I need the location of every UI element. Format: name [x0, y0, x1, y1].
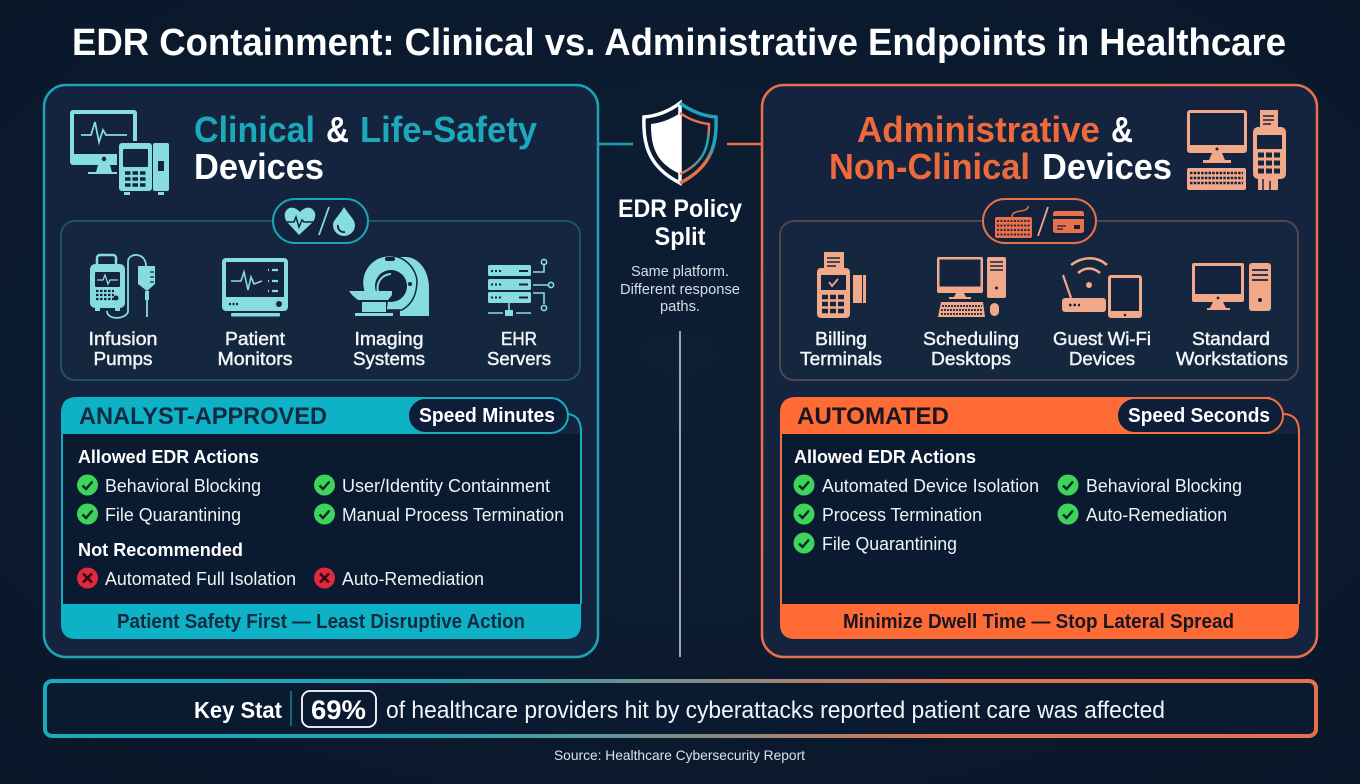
allowed actions: File Quarantining: [105, 505, 241, 525]
label: Patient: [225, 328, 285, 349]
label: Standard: [1192, 328, 1270, 349]
label: EHR: [501, 328, 537, 349]
allowed actions: Allowed EDR Actions: [794, 447, 976, 467]
speed pill: Speed Minutes: [419, 405, 555, 427]
device: billing terminals: [800, 252, 882, 369]
heading: clinical and life-safety devices: &: [326, 109, 349, 150]
key stat label: Key Stat: [194, 697, 282, 723]
key stat bar: [45, 681, 1316, 736]
icon: desktop and payment terminal: [1187, 110, 1286, 190]
label: Desktops: [931, 348, 1011, 369]
center description: Same platform.: [631, 263, 729, 280]
title: EDR Containment: Clinical vs. Administrative Endpoints in Healthcare: [72, 22, 1286, 64]
card footer: Minimize Dwell Time — Stop Lateral Spread: [843, 611, 1234, 633]
heading: clinical and life-safety devices: Devices: [194, 146, 324, 187]
allowed actions: Allowed EDR Actions: [78, 447, 259, 467]
label: Systems: [353, 348, 425, 369]
heading: administrative and non-clinical devices: Devices: [1042, 146, 1172, 187]
card label: ANALYST-APPROVED: [79, 403, 327, 430]
heading: clinical and life-safety devices: Clinical: [194, 109, 315, 150]
label: Scheduling: [923, 328, 1019, 349]
badge: heart and drop: [273, 199, 368, 243]
allowed actions: Behavioral Blocking: [105, 476, 261, 496]
device: standard workstations: [1176, 263, 1288, 369]
center heading: Split: [654, 223, 706, 251]
icon: workstation: [1192, 263, 1271, 311]
icon: CT scanner: [349, 256, 429, 316]
badge: keyboard and card: [983, 199, 1096, 243]
device group box: administrative: [780, 199, 1298, 380]
panel: administrative and non-clinical devices: [762, 85, 1317, 657]
stat value: 69%: [311, 695, 366, 725]
allowed actions: Auto-Remediation: [1086, 505, 1227, 525]
not recommended actions: Not Recommended: [78, 540, 243, 560]
allowed actions: [794, 447, 1242, 554]
heading: clinical and life-safety devices: [194, 109, 537, 187]
speed pill: [408, 398, 568, 433]
icon: infusion pump: [90, 255, 155, 318]
device group box: clinical: [61, 199, 580, 380]
label: Pumps: [94, 348, 152, 369]
source: Source: Healthcare Cybersecurity Report: [554, 747, 805, 763]
center description: paths.: [660, 298, 700, 315]
allowed actions: File Quarantining: [822, 534, 957, 554]
device: scheduling desktops: [923, 257, 1019, 369]
card footer: [780, 604, 1299, 639]
card header bar: [61, 397, 550, 434]
allowed actions: Automated Device Isolation: [822, 476, 1039, 496]
icon: router, wifi and tablet: [1062, 258, 1142, 318]
icon: billing terminal: [817, 252, 866, 318]
label: Monitors: [218, 348, 292, 369]
heading: administrative and non-clinical devices: Administrative: [857, 109, 1100, 150]
icon: patient monitor: [222, 258, 288, 316]
heading: administrative and non-clinical devices: &: [1111, 109, 1133, 150]
allowed actions: Behavioral Blocking: [1086, 476, 1242, 496]
label: Imaging: [354, 328, 424, 349]
center divider line: [679, 331, 681, 657]
icon: split shield: [644, 103, 716, 183]
panel: clinical and life-safety devices: [44, 85, 598, 657]
allowed actions: User/Identity Containment: [342, 476, 550, 496]
center heading: EDR Policy: [618, 195, 742, 223]
speed pill: Speed Seconds: [1128, 405, 1270, 427]
icon: clinical monitor and pump: [70, 110, 169, 195]
center: EDR policy split: [598, 103, 762, 657]
response card: automated: [780, 397, 1299, 639]
device: EHR servers: [487, 259, 554, 369]
stat description: of healthcare providers hit by cyberattacks reported patient care was affected: [386, 697, 1165, 724]
heading: administrative and non-clinical devices: Non-Clinical: [829, 146, 1030, 187]
label: Servers: [487, 348, 551, 369]
not recommended actions: Automated Full Isolation: [105, 569, 296, 589]
icon: desktop with keyboard: [937, 257, 1006, 317]
card footer: [61, 604, 581, 639]
device: patient monitors: [218, 258, 292, 369]
allowed actions: [77, 447, 564, 525]
device: guest wi-fi devices: [1053, 258, 1151, 369]
card footer: Patient Safety First — Least Disruptive Action: [117, 611, 525, 633]
label: Devices: [1069, 348, 1135, 369]
center description: Different response: [620, 281, 740, 298]
stat value: [302, 691, 376, 727]
device: infusion pumps: [88, 255, 158, 369]
not recommended actions: Auto-Remediation: [342, 569, 484, 589]
response card: analyst-approved: [61, 397, 581, 639]
allowed actions: Manual Process Termination: [342, 505, 564, 525]
icon: server rack: [488, 259, 554, 316]
label: Workstations: [1176, 348, 1288, 369]
device: imaging systems: [349, 256, 429, 369]
label: Infusion: [88, 328, 158, 349]
heading: clinical and life-safety devices: Life-Safety: [360, 109, 537, 150]
heading: administrative and non-clinical devices: [829, 109, 1172, 187]
not recommended actions: [77, 540, 484, 589]
connector: right: [727, 143, 762, 145]
speed pill: [1117, 398, 1283, 433]
allowed actions: Process Termination: [822, 505, 982, 525]
label: Billing: [815, 328, 867, 349]
label: Guest Wi-Fi: [1053, 328, 1151, 349]
label: Terminals: [800, 348, 882, 369]
connector: left: [598, 143, 633, 145]
card label: AUTOMATED: [797, 403, 949, 430]
card header bar: [780, 397, 1270, 434]
